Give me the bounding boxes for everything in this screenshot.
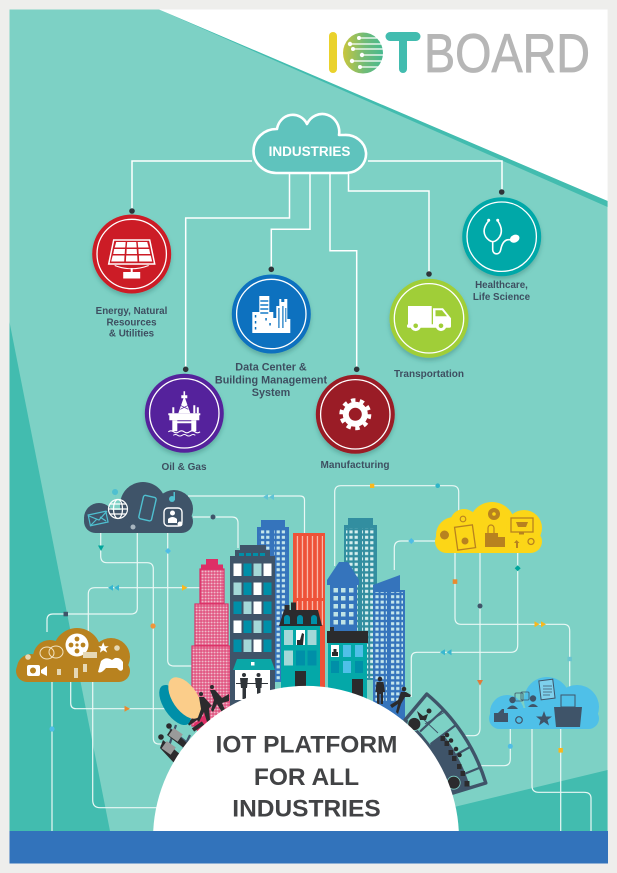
main heading: FOR ALL — [254, 764, 359, 791]
back teal tower — [344, 518, 377, 680]
icon: buildings badge — [232, 274, 311, 354]
blue gabled tower — [327, 562, 359, 650]
cafe shop with people — [233, 659, 275, 700]
bus body — [428, 734, 470, 793]
main heading: IOT PLATFORM — [216, 732, 397, 759]
footer bar — [10, 831, 608, 864]
cityscape — [192, 518, 405, 726]
central white dome — [153, 686, 459, 831]
satellite dish — [153, 672, 210, 732]
industry: energy — [92, 214, 171, 340]
diagonal accent strip — [159, 10, 608, 207]
logo letter T — [386, 32, 420, 73]
industry: oil and gas — [145, 374, 224, 473]
label: energy: Resources — [106, 318, 157, 328]
cloud: entertainment — [16, 628, 130, 682]
standing people right — [376, 677, 411, 714]
connector end dots — [129, 189, 505, 372]
cloud: shopping — [435, 502, 542, 553]
seated commuters — [158, 723, 191, 764]
industry: data center — [215, 274, 327, 399]
red striped tower — [293, 533, 325, 691]
industry: transportation — [390, 279, 468, 380]
bus passengers — [417, 708, 470, 786]
icon: gear badge — [316, 375, 395, 454]
icons: video reel game pad — [25, 634, 123, 678]
logo word BOARD: BOARD — [424, 22, 590, 84]
left dark teal wedge — [10, 322, 110, 831]
icon: stethoscope badge — [462, 197, 541, 276]
pink tower — [192, 559, 230, 726]
industries cloud: INDUSTRIES — [269, 144, 350, 159]
walking people — [197, 685, 229, 722]
label: energy: & Utilities — [109, 328, 155, 340]
logo letter I — [329, 32, 337, 73]
icon: truck badge — [390, 279, 468, 358]
label: data center: System — [252, 387, 290, 399]
label: healthcare: Life Science — [473, 292, 531, 303]
label: oil and gas: Oil & Gas — [161, 462, 207, 473]
cloud: social and files — [489, 677, 599, 729]
small teal house — [327, 627, 368, 703]
teal townhouse — [279, 602, 322, 696]
icon: oil rig badge — [145, 374, 224, 453]
dark office building — [230, 545, 275, 706]
right blue tower — [373, 575, 405, 720]
lower network lines — [47, 486, 591, 831]
back blue tower — [257, 520, 289, 682]
bus on arc — [405, 694, 486, 793]
icons: notebook disc bag cart — [440, 508, 534, 550]
industry: manufacturing — [316, 375, 395, 471]
label: manufacturing: Manufacturing — [321, 460, 389, 471]
logo letter O circuit — [343, 32, 383, 74]
icons: thumb people folder star — [494, 695, 582, 727]
industry: healthcare — [462, 197, 541, 303]
label: data center: Building Management — [215, 374, 327, 386]
label: transportation: Transportation — [394, 369, 464, 380]
white corner with logo — [159, 10, 608, 201]
main heading: INDUSTRIES — [232, 796, 381, 823]
label: healthcare: Healthcare, — [475, 280, 528, 291]
cloud: communications — [84, 482, 193, 533]
label: energy: Energy, Natural — [96, 306, 168, 317]
label: data center: Data Center & — [235, 362, 307, 374]
network markers — [49, 483, 572, 753]
right dark teal wedge — [450, 770, 608, 831]
bus wheels — [408, 718, 421, 730]
connector lines from industries cloud — [132, 161, 502, 369]
icons: mail globe phone contact — [88, 495, 182, 526]
logo — [329, 22, 590, 84]
icon: solar panel badge — [92, 214, 171, 294]
bus window dividers — [420, 710, 480, 775]
industries cloud — [254, 114, 366, 173]
